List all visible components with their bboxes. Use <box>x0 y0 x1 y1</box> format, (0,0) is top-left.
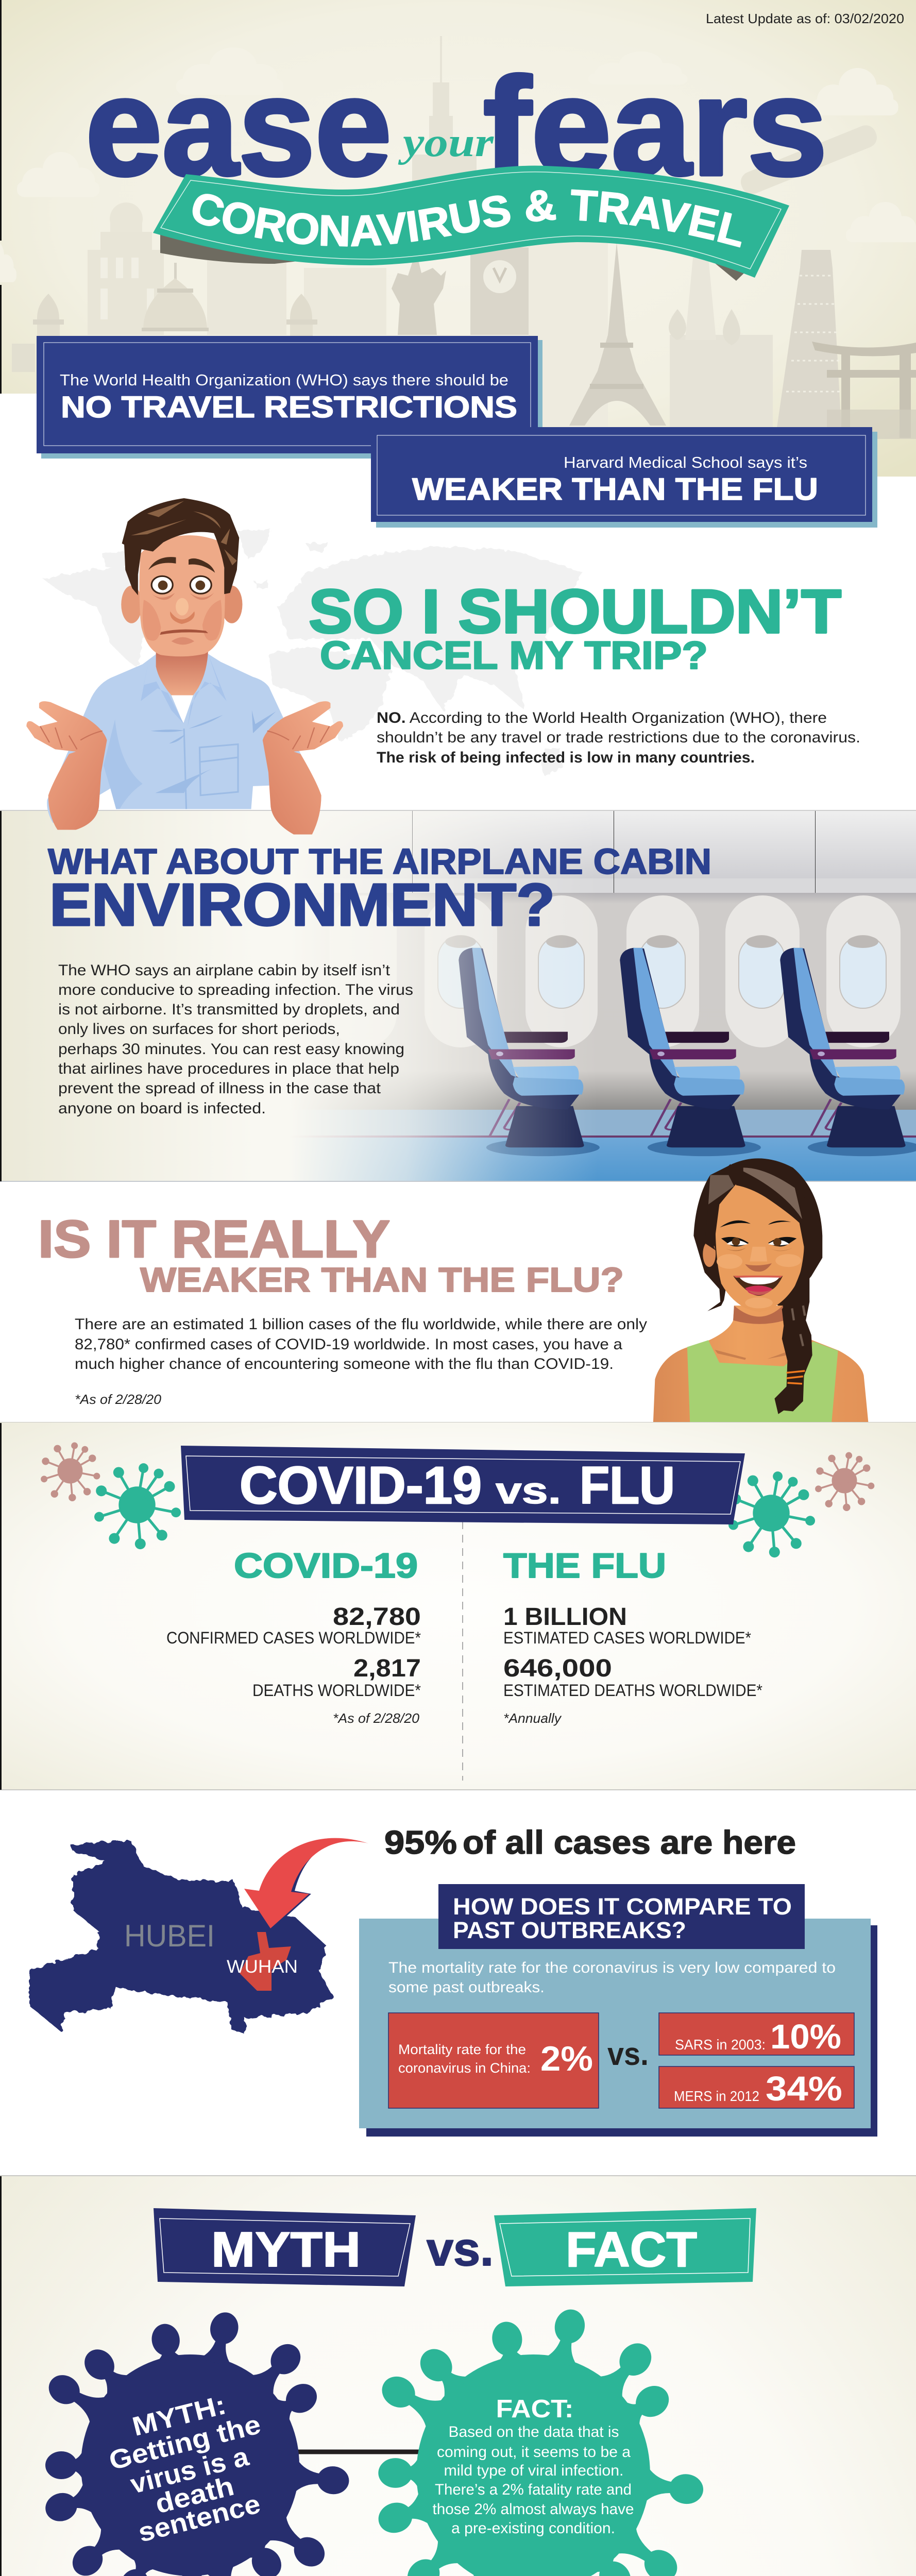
text block: cabin: prevent the spread of illness in the case that <box>58 1080 381 1097</box>
myth 1 virus: MYTH: <box>129 2390 229 2442</box>
column: flu stats: *Annually <box>503 1710 562 1726</box>
text block: flu comparison: 82,780* confirmed cases of COVID-19 worldwide. In most cases, you have a <box>75 1336 622 1353</box>
stat: MERS 34%: MERS in 2012 <box>674 2088 759 2104</box>
heading: so I shouldn't cancel my trip: SO I SHOULDN’T <box>309 577 841 646</box>
column: flu stats: THE FLU <box>503 1546 666 1585</box>
text block: cabin: is not airborne. It’s transmitted by droplets, and <box>58 1001 400 1018</box>
stat: SARS 10%: SARS in 2003: <box>675 2037 766 2053</box>
banner: fact: FACT <box>566 2222 697 2277</box>
connectors between myths and facts <box>258 2452 587 2576</box>
banner: COVID-19 vs flu <box>181 1446 745 1524</box>
myth 1 virus: sentence <box>135 2489 263 2548</box>
stat: COVID mortality 2% <box>388 2013 599 2108</box>
stat: SARS 10%: 10% <box>770 2018 841 2056</box>
column: COVID-19 stats: 82,780 <box>333 1603 421 1631</box>
title: ease your fears: ease <box>86 49 392 205</box>
heading: so I shouldn't cancel my trip <box>309 577 841 677</box>
banner: coronavirus and travel: CORONAVIRUS & TRAVEL <box>193 190 742 247</box>
banner: COVID-19 vs flu: COVID-19 <box>240 1456 482 1515</box>
skyline: Empire State <box>412 36 477 252</box>
callout: weaker than the flu <box>371 427 877 528</box>
text block: flu comparison: There are an estimated 1 billion cases of the flu worldwide, while there are only <box>75 1316 647 1333</box>
column: COVID-19 stats: 2,817 <box>353 1655 421 1682</box>
skyline: Pisa and torii gate <box>777 250 916 439</box>
text block: no answer: NO. According to the World Health Organization (WHO), there <box>377 709 827 726</box>
stat: 95% of all cases: of all cases are here <box>463 1824 796 1861</box>
illustration: smiling woman <box>653 1158 869 1423</box>
panel: COVID-19 vs flu background <box>0 1422 916 1790</box>
world map background <box>44 530 582 775</box>
fact 1 virus: There’s a 2% fatality rate and <box>435 2481 632 2498</box>
text block: flu comparison <box>75 1316 647 1407</box>
text block: cabin: that airlines have procedures in place that help <box>58 1060 399 1077</box>
illustration: shrugging man <box>26 498 343 835</box>
text block: cabin: The WHO says an airplane cabin by itself isn’t <box>58 962 391 979</box>
virus icons around the banner <box>41 1443 874 1557</box>
panel heading: HOW DOES IT COMPARE TO <box>453 1893 792 1920</box>
column: COVID-19 stats <box>166 1546 421 1726</box>
panel: airplane cabin <box>0 810 916 1182</box>
fact 1 virus: FACT: <box>496 2395 574 2423</box>
left edge strips <box>0 0 2 2576</box>
map: Hubei province with Wuhan: WUHAN <box>227 1957 298 1977</box>
callout: weaker than the flu: WEAKER THAN THE FLU <box>412 472 818 506</box>
title: ease your fears: your <box>398 120 494 165</box>
banner: myth: MYTH <box>211 2222 361 2277</box>
stat: COVID mortality 2%: 2% <box>540 2039 593 2078</box>
text block: cabin: only lives on surfaces for short periods, <box>58 1021 340 1038</box>
panel: myth vs fact background <box>0 2176 916 2576</box>
fact 1 virus: a pre-existing condition. <box>451 2520 615 2537</box>
floor <box>258 1110 916 1136</box>
text block: cabin: more conducive to spreading infection. The virus <box>58 981 413 998</box>
panel intro text <box>388 1959 836 1996</box>
callout: no travel restrictions: NO TRAVEL RESTRICTIONS <box>61 391 517 424</box>
myth 1 virus: death <box>152 2471 237 2519</box>
text block: flu comparison: *As of 2/28/20 <box>75 1392 162 1407</box>
column: COVID-19 stats: *As of 2/28/20 <box>333 1710 420 1726</box>
callout: no travel restrictions: The World Health Organization (WHO) says there should be <box>60 371 508 389</box>
arrow: red pointing to Wuhan <box>244 1838 368 1929</box>
title: ease your fears: fears <box>483 49 827 205</box>
banner: fact <box>494 2208 756 2286</box>
panel: past outbreaks comparison <box>359 1884 877 2137</box>
heading: airplane cabin environment <box>48 841 711 938</box>
heading: so I shouldn't cancel my trip: CANCEL MY TRIP? <box>320 634 708 677</box>
column: flu stats <box>503 1546 762 1726</box>
clouds <box>0 47 916 282</box>
label: vs: vs. <box>607 2037 649 2072</box>
header update date: Latest Update as of: 03/02/2020 <box>706 11 904 26</box>
skyline: left tower and Taj Mahal <box>12 202 386 372</box>
column: flu stats: 1 BILLION <box>503 1603 627 1631</box>
column: COVID-19 stats: DEATHS WORLDWIDE* <box>252 1681 421 1700</box>
heading: is it really weaker than the flu: WEAKER THAN THE FLU? <box>140 1261 624 1299</box>
myth 1 virus: Getting the <box>106 2410 264 2476</box>
callout: no travel restrictions <box>37 336 542 459</box>
stat: SARS 10% <box>659 2013 854 2056</box>
panel intro text: The mortality rate for the coronavirus is very low compared to <box>388 1959 836 1976</box>
banner: coronavirus and travel <box>153 166 789 281</box>
text block: no answer: The risk of being infected is low in many countries. <box>377 749 755 766</box>
skyline: Liberty and Big Ben <box>392 247 529 335</box>
column: flu stats: 646,000 <box>503 1655 612 1682</box>
window surrounds <box>330 895 901 1047</box>
column: flu stats: ESTIMATED DEATHS WORLDWIDE* <box>503 1681 762 1700</box>
heading: is it really weaker than the flu <box>38 1210 624 1299</box>
windows <box>438 936 886 1008</box>
column: flu stats: ESTIMATED CASES WORLDWIDE* <box>503 1629 751 1647</box>
faint airplane <box>738 122 880 197</box>
stat: MERS 34% <box>659 2066 854 2108</box>
panel heading <box>438 1884 805 1949</box>
label: vs: vs. <box>427 2223 494 2276</box>
fact 1 virus: Based on the data that is <box>448 2424 619 2441</box>
banner: myth <box>154 2208 416 2286</box>
stat: COVID mortality 2%: coronavirus in China: <box>398 2060 531 2076</box>
text block: cabin: anyone on board is infected. <box>58 1100 266 1117</box>
callout: weaker than the flu: Harvard Medical School says it’s <box>564 453 807 471</box>
heading: airplane cabin environment: ENVIRONMENT? <box>49 871 555 938</box>
map: Hubei province with Wuhan <box>29 1841 333 2035</box>
fact 1 virus: those 2% almost always have <box>433 2501 634 2518</box>
stat: COVID mortality 2%: Mortality rate for the <box>398 2042 526 2057</box>
text block: no answer: shouldn’t be any travel or trade restrictions due to the coronavirus. <box>377 729 860 746</box>
seats <box>459 948 600 1156</box>
divider dashed <box>462 1521 463 1781</box>
panel: header background with skyline <box>0 0 916 477</box>
panel intro text: some past outbreaks. <box>388 1979 545 1996</box>
text block: flu comparison: much higher chance of encountering someone with the flu than COVID-19. <box>75 1355 614 1372</box>
skyline: right towers, Eiffel, St Basil <box>529 242 773 428</box>
heading: airplane cabin environment: WHAT ABOUT THE AIRPLANE CABIN <box>48 841 711 882</box>
text block: no answer <box>377 709 860 766</box>
title: ease your fears <box>86 49 827 205</box>
heading: is it really weaker than the flu: IS IT REALLY <box>38 1210 390 1268</box>
text block: cabin: perhaps 30 minutes. You can rest easy knowing <box>58 1041 404 1058</box>
myth 1 virus: virus is a <box>127 2442 252 2500</box>
banner: COVID-19 vs flu: FLU <box>580 1456 675 1515</box>
column: COVID-19 stats: COVID-19 <box>234 1546 418 1585</box>
text block: cabin <box>58 962 413 1117</box>
myth 1 virus <box>41 2309 351 2576</box>
stat: 95% of all cases: 95% <box>384 1824 457 1861</box>
fact 1 virus: mild type of viral infection. <box>444 2462 623 2479</box>
map: Hubei province with Wuhan: HUBEI <box>124 1919 215 1953</box>
panel heading: PAST OUTBREAKS? <box>453 1917 686 1943</box>
column: COVID-19 stats: CONFIRMED CASES WORLDWIDE* <box>166 1629 421 1647</box>
banner: COVID-19 vs flu: vs. <box>496 1470 561 1512</box>
man's hands <box>26 701 343 835</box>
stat: MERS 34%: 34% <box>766 2070 842 2108</box>
fact 1 virus <box>374 2306 705 2576</box>
fact 1 virus: coming out, it seems to be a <box>437 2444 631 2461</box>
